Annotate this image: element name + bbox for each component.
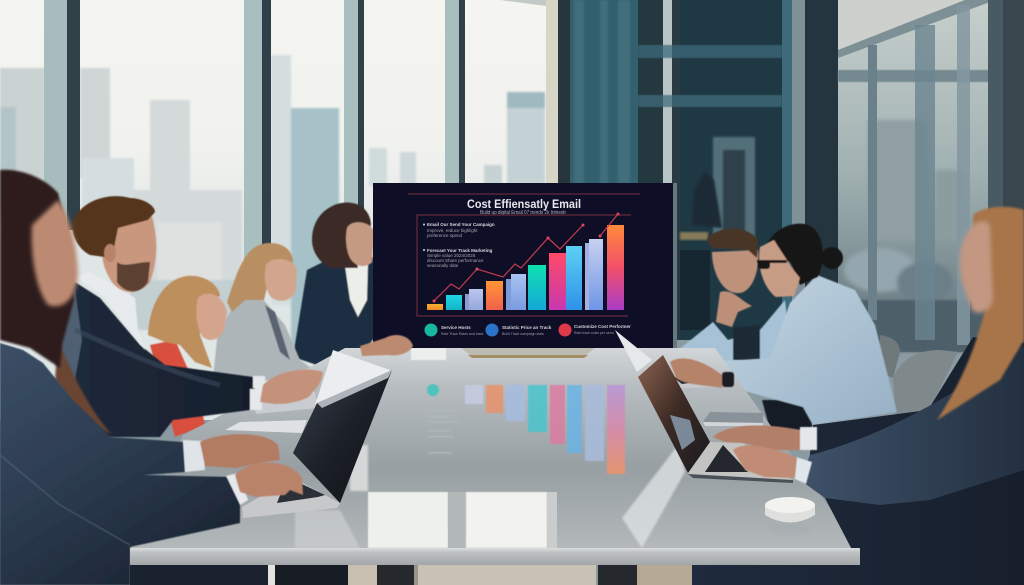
- legend row: Service Hosts: [441, 325, 471, 330]
- legend row: Rate Track Rates and track: [441, 332, 484, 336]
- bullet text left: Forecast Your Track Marketing: [427, 248, 493, 253]
- table front edge: [130, 548, 860, 565]
- screen subtitle: Build up digital Email 07 trends 2k trimestr: [480, 210, 566, 216]
- speakerphone puck: [765, 497, 815, 535]
- laptop: front left: [242, 370, 392, 518]
- person: woman in front right: [692, 207, 1024, 585]
- legend row: Statistic Price an Track: [502, 325, 552, 330]
- hands: standing woman: [360, 335, 413, 356]
- table top: [130, 348, 860, 550]
- bar chart: [427, 225, 624, 310]
- person: man in light shirt: [672, 229, 790, 375]
- person: woman in grey tweed: [213, 243, 317, 382]
- legend row: Build Track campaign stats: [502, 332, 544, 336]
- bullet text left: Email Our Send Your Campaign: [427, 222, 495, 227]
- screen reflection on table: [427, 384, 625, 474]
- chart frame: [408, 194, 640, 316]
- hands and cuffs: front right woman: [713, 426, 817, 484]
- right window wall: [838, 0, 1024, 360]
- hands and cuffs: front left woman: [183, 434, 303, 505]
- floor and table legs: [130, 565, 692, 585]
- dark glass wall with interior reflections: [570, 0, 838, 340]
- notebook on table: [703, 412, 763, 426]
- trend line: [432, 212, 620, 302]
- legend row: Rate track costs per send: [574, 331, 614, 335]
- papers and laptop base on left table: [225, 392, 318, 433]
- display screen with chart: [373, 183, 677, 348]
- skyline buildings: [0, 55, 545, 348]
- hand and watch: bun woman: [670, 358, 734, 388]
- legend row: Customize Cost Performer: [574, 324, 631, 329]
- legend row: [424, 324, 631, 336]
- bullet text left: preference spend: [427, 233, 463, 238]
- parked cars reflection: [844, 248, 953, 302]
- person: woman in front left: [0, 170, 303, 585]
- laptop: front right: [638, 355, 793, 483]
- monitor stand: [460, 347, 596, 358]
- screen title: Cost Effiensatly Email: [467, 199, 581, 211]
- bullet text left: Improve, reduce highlight: [427, 228, 478, 233]
- person: bearded man in suit: [52, 196, 323, 437]
- chairs on right: [878, 335, 958, 420]
- bullet text left: discount Share performance: [427, 258, 484, 263]
- laptop: back right: [615, 330, 723, 388]
- person: woman in red: [148, 276, 227, 437]
- person: standing woman: [293, 203, 380, 366]
- bullet text left: [423, 222, 495, 268]
- background: window wall and city skyline: [0, 0, 570, 420]
- person: woman with bun in blue shirt: [708, 224, 897, 430]
- laptop: back left white lid: [315, 350, 390, 405]
- bullet text left: Simple value 2024/2025: [427, 253, 476, 258]
- window mullions: [44, 0, 570, 260]
- bullet text left: seasonally date: [427, 263, 459, 268]
